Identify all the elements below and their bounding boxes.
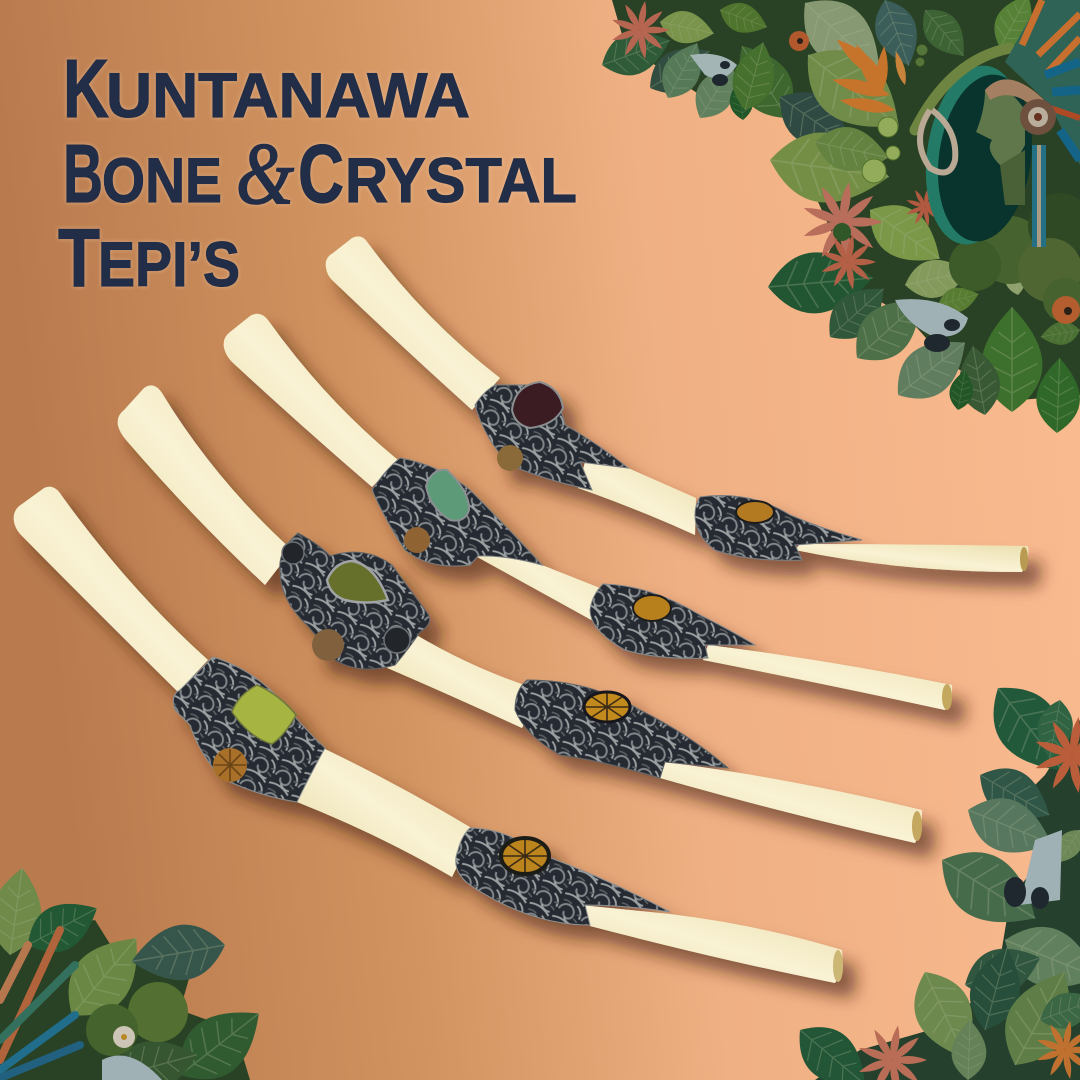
- amber flower inlays: [312, 629, 630, 722]
- amber flower inlays: [404, 527, 671, 621]
- title: EPI’S: [98, 230, 240, 300]
- garnet stone: [512, 382, 563, 428]
- moss and river: [690, 31, 1080, 352]
- title: RYSTAL: [345, 146, 577, 216]
- bird of paradise: [831, 34, 909, 116]
- tepi 3: green aventurine stone: [224, 314, 952, 710]
- pink flowers: [611, 0, 945, 290]
- bottom left feather fan: [0, 930, 80, 1078]
- aventurine stone: [426, 470, 469, 521]
- title: UNTANAWA: [106, 61, 470, 131]
- tepi 2: olive stone with scrolls: [118, 385, 922, 843]
- olive stone: [327, 561, 388, 602]
- foliage: bottom right: [784, 669, 1080, 1080]
- tepi 4: back, garnet stone: [326, 236, 1028, 572]
- title: B: [63, 127, 103, 220]
- title: T: [58, 211, 100, 304]
- bottom right flowers and stream: [858, 716, 1080, 1080]
- fruits: [862, 45, 927, 183]
- title: ONE: [102, 146, 222, 216]
- title: K: [63, 42, 109, 135]
- foliage: bottom left: [0, 864, 277, 1080]
- lime stone: [232, 685, 296, 744]
- scrolls: [282, 542, 410, 653]
- moss, stream and white flower: [86, 982, 188, 1080]
- foliage: top right with headdress figure: [595, 0, 1080, 434]
- amber flower inlays: [497, 445, 774, 523]
- tepi 1: front, lime stone: [14, 487, 843, 983]
- title: &: [236, 126, 294, 223]
- title: [58, 42, 577, 304]
- portal and stone face with headdress: [915, 0, 1080, 251]
- title: C: [298, 127, 344, 220]
- amber flower inlays: [213, 748, 549, 874]
